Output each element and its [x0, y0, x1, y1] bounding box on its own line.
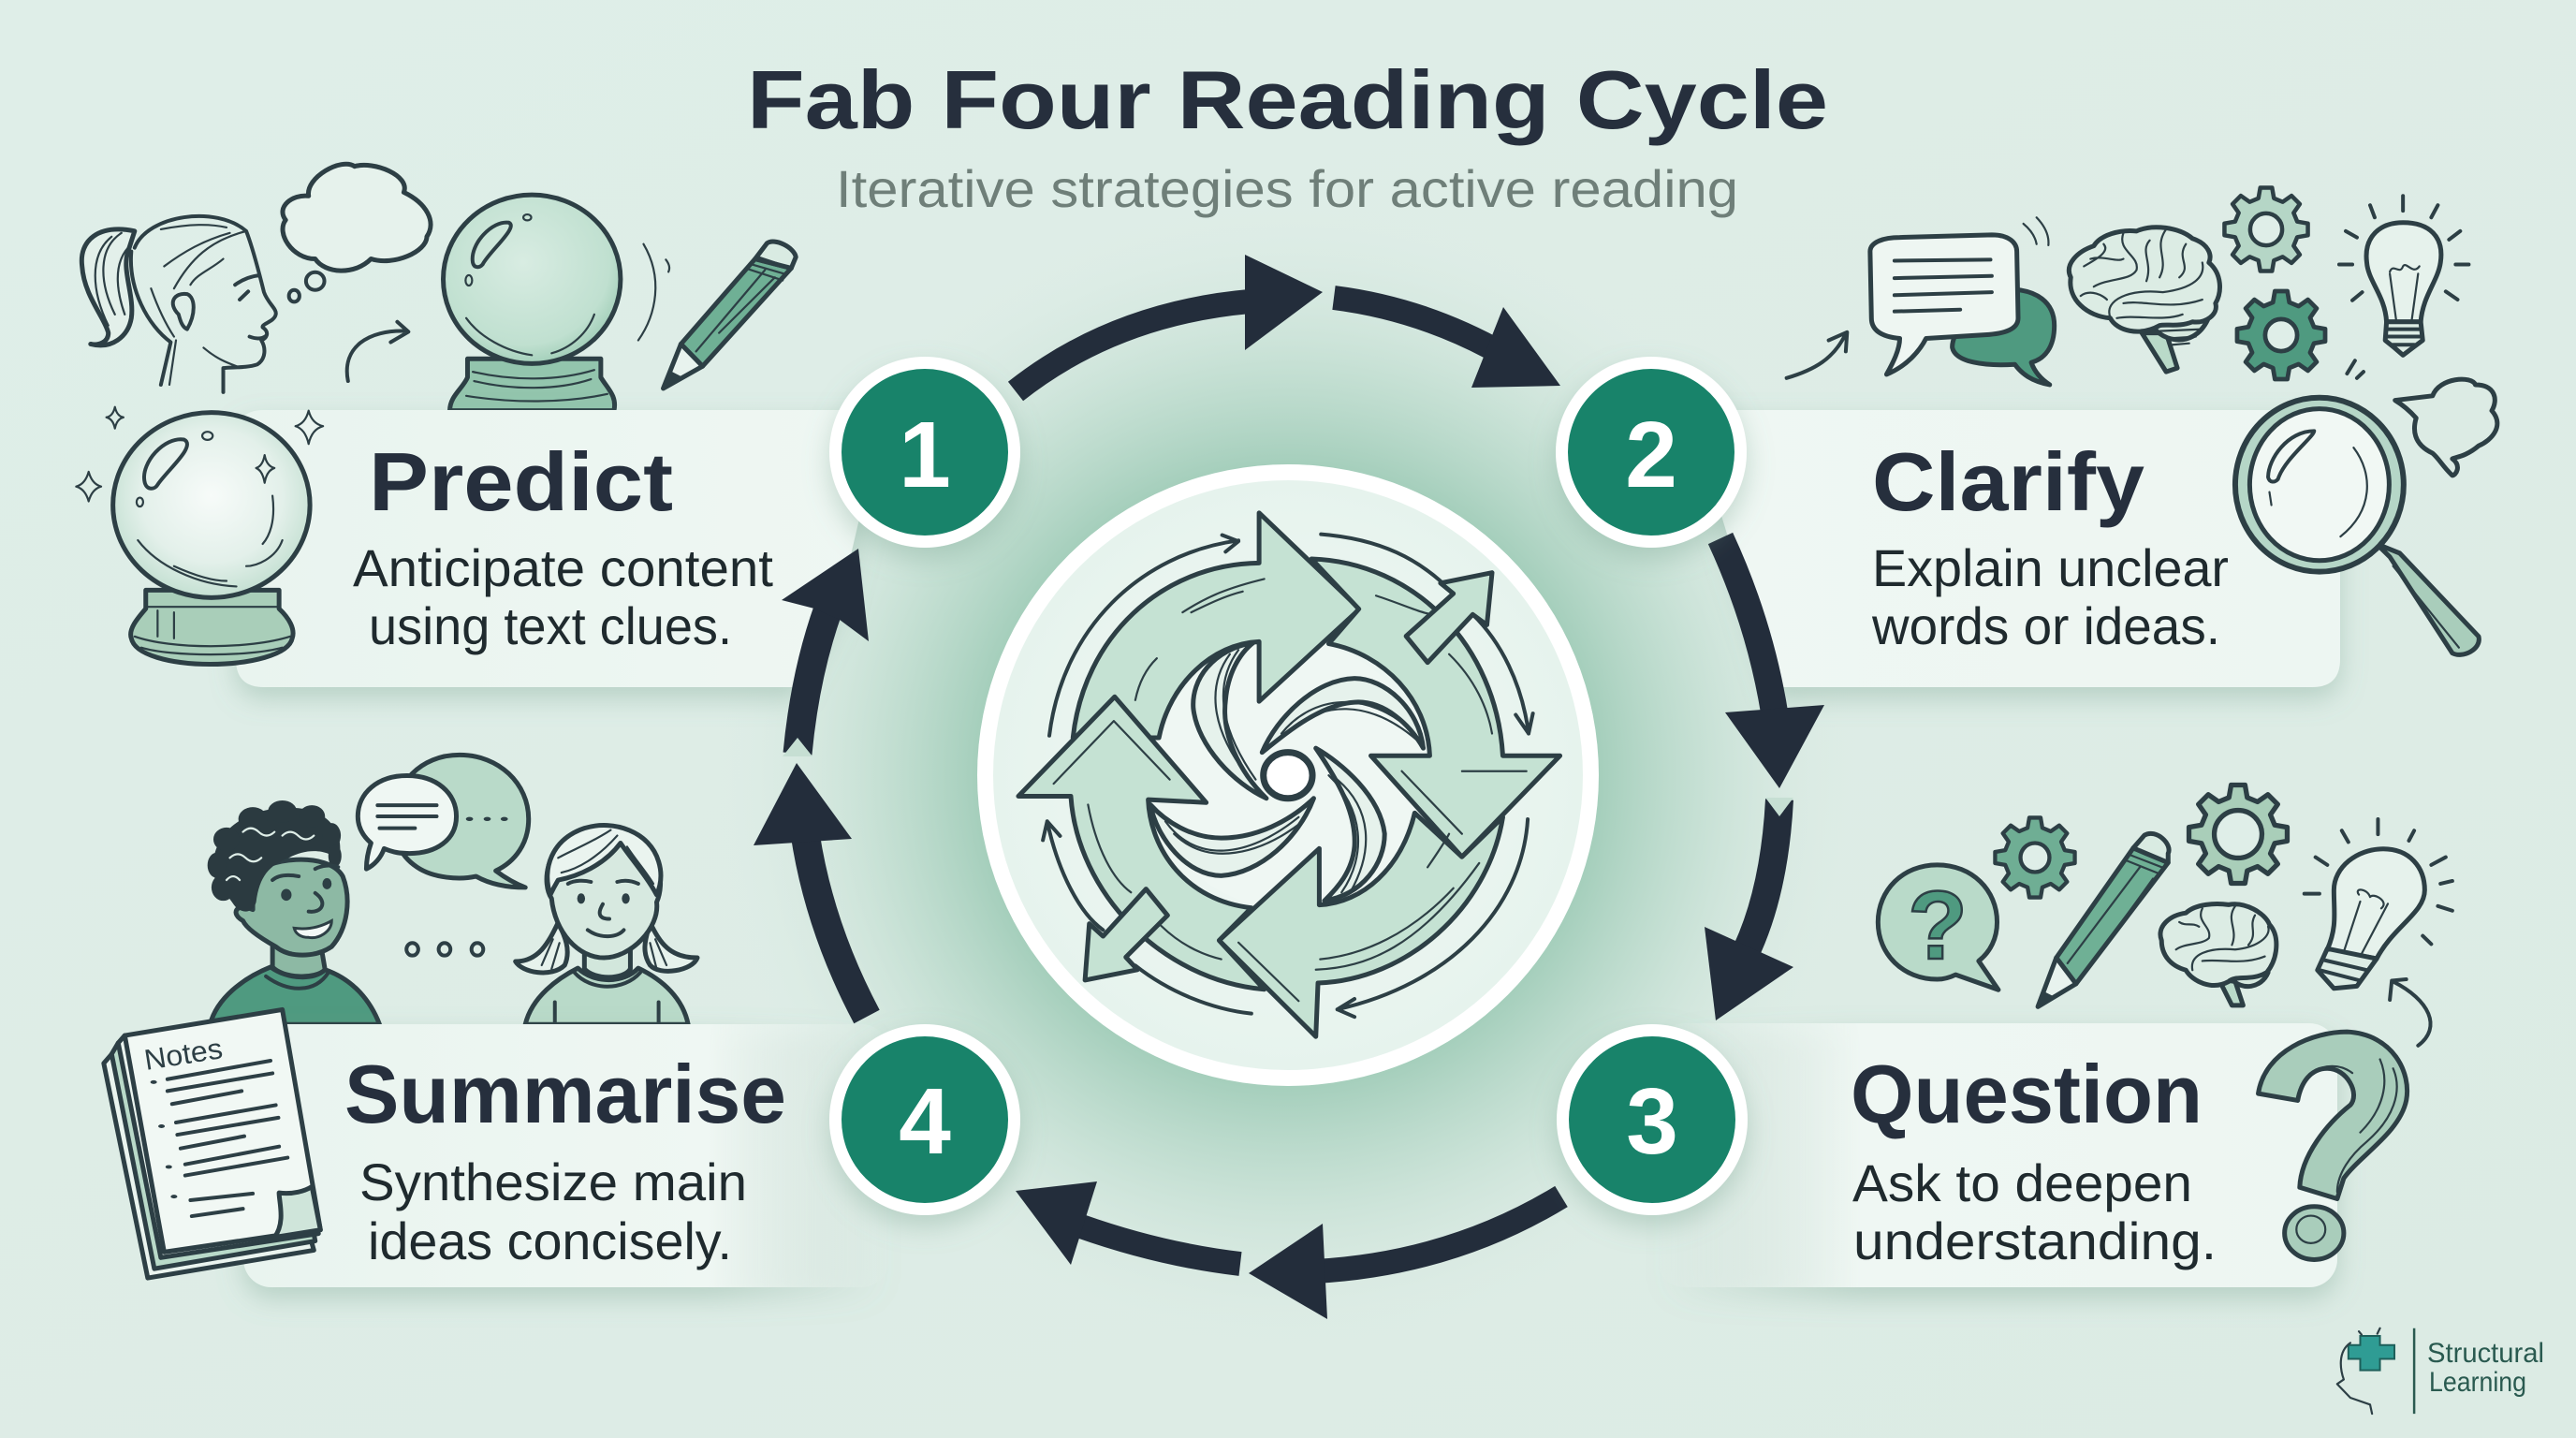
arrow: step 3 to 4 part two — [1016, 1181, 1240, 1265]
panel: Question — [1657, 1023, 2337, 1287]
illustration: question icons — [1878, 819, 2452, 1046]
arrow: curved — [347, 322, 408, 381]
number badge 1: 1 — [899, 403, 951, 507]
icon: brain — [2069, 227, 2219, 372]
icon: speech outline — [2395, 379, 2497, 476]
number badge 3: 3 — [1626, 1069, 1678, 1174]
text: Summarise description: ideas concisely. — [368, 1211, 732, 1270]
icon: central swirl of arrows — [1018, 513, 1560, 1036]
text: Clarify description — [1871, 538, 2229, 655]
heading: Predict: Predict — [369, 435, 673, 528]
number badge 4 — [829, 1024, 1020, 1215]
icon: large speech bubble — [394, 755, 529, 888]
illustration: crystal ball on Predict panel — [76, 407, 323, 664]
illustration: two children talking — [208, 755, 697, 1024]
cycle arrows — [754, 255, 1824, 1319]
centre disc — [977, 464, 1599, 1086]
icon: upper crystal ball — [444, 195, 621, 411]
question mark inside bubble: ? — [1908, 872, 1968, 980]
icon: question bubble — [1878, 865, 1998, 990]
title: Fab Four Reading Cycle — [747, 53, 1828, 146]
notes label: Notes — [142, 1032, 225, 1077]
illustration: clarify icons — [1787, 196, 2468, 385]
icon: big question mark — [2259, 1032, 2408, 1259]
arrow: top — [1073, 513, 1360, 738]
motion marks — [638, 244, 669, 341]
icon: tilted lightbulb — [2305, 819, 2452, 989]
illustration: stacked notes on Summarise panel — [104, 1009, 320, 1278]
icon: thought bubble — [283, 164, 431, 301]
arrow: step 2 to 3 part one — [1720, 538, 1824, 788]
icon: pencil — [2038, 833, 2169, 1006]
logo: Structural Learning — [2337, 1328, 2544, 1414]
illustration: girl, thought bubble, crystal ball and pencil — [81, 164, 796, 411]
number badge 2: 2 — [1625, 403, 1677, 507]
icon: white speech bubble — [1870, 235, 2018, 374]
arrow: step 2 to 3 part two — [1705, 798, 1793, 1020]
arrow: small — [1787, 332, 1847, 378]
heading: Question: Question — [1851, 1048, 2203, 1140]
icon: lightbulb — [2339, 196, 2468, 378]
text: Clarify description: Explain unclear — [1872, 538, 2229, 597]
arrow: bottom — [1219, 813, 1502, 1036]
logo icon: head with plus — [2337, 1328, 2414, 1414]
number badge 4: 4 — [899, 1069, 951, 1174]
icon: girl — [516, 826, 697, 1024]
arrow: step 3 to 4 part one — [1249, 1196, 1561, 1319]
icon: brain — [2160, 904, 2276, 1005]
small light arrows — [1085, 573, 1492, 980]
panel: Summarise — [243, 1024, 889, 1287]
subtitle: Iterative strategies for active reading — [836, 159, 1738, 218]
icon: green speech bubble — [1953, 289, 2055, 385]
text: Predict description: using text clues. — [369, 596, 732, 655]
swirl centre — [1264, 753, 1312, 799]
icon: medium gear — [1995, 817, 2075, 898]
inner disc — [1151, 641, 1427, 909]
number badge 3 — [1557, 1024, 1748, 1215]
heading: Clarify: Clarify — [1872, 435, 2144, 528]
icon: girl in profile — [81, 216, 276, 392]
arrow: step 1 to 2 part one — [1016, 255, 1323, 391]
number badge 1 — [829, 357, 1020, 548]
icon: notes pages — [104, 1009, 320, 1278]
sound marks — [2024, 217, 2048, 245]
thin outer arrows — [1043, 535, 1533, 1017]
icon: boy — [208, 800, 379, 1024]
icon: sparkles — [76, 407, 323, 502]
heading: Summarise: Summarise — [344, 1048, 786, 1140]
illustration: magnifier and thought bubble on Clarify panel — [2235, 379, 2497, 654]
icon: light gear — [2224, 187, 2308, 271]
icon: magnifier — [2235, 398, 2479, 654]
icon: dark gear — [2237, 291, 2325, 379]
text: Summarise description: Synthesize main — [359, 1152, 747, 1211]
icon: pencil — [664, 242, 796, 389]
icon: lower crystal ball — [113, 413, 310, 664]
arrow: left — [1018, 697, 1265, 990]
arrow: step 1 to 2 part two — [1334, 298, 1560, 388]
logo wordmark: Structural — [2427, 1338, 2544, 1369]
number badge 2 — [1556, 357, 1747, 548]
arrow: right — [1311, 559, 1560, 857]
panel: Clarify — [1690, 410, 2340, 687]
logo wordmark — [2427, 1338, 2544, 1398]
text: Question description: understanding. — [1853, 1211, 2217, 1270]
icon: large gear — [2189, 785, 2287, 883]
swirl blades — [1150, 642, 1424, 901]
icon: small speech bubble — [358, 776, 457, 869]
text: Summarise description — [359, 1152, 747, 1270]
speech pause dots — [406, 943, 483, 956]
text: Question description — [1852, 1153, 2217, 1270]
arrow: step 4 to 1 part one — [754, 763, 867, 1017]
text: Predict description — [353, 538, 773, 655]
logo wordmark: Learning — [2429, 1367, 2526, 1398]
text: Clarify description: words or ideas. — [1871, 596, 2220, 655]
arrow: step 4 to 1 part two — [782, 549, 869, 756]
text: Question description: Ask to deepen — [1852, 1153, 2192, 1212]
panel: Predict — [236, 410, 885, 687]
arrow: small curved — [2390, 979, 2431, 1046]
arrow shading strokes — [1054, 579, 1527, 1001]
text: Predict description: Anticipate content — [353, 538, 773, 597]
